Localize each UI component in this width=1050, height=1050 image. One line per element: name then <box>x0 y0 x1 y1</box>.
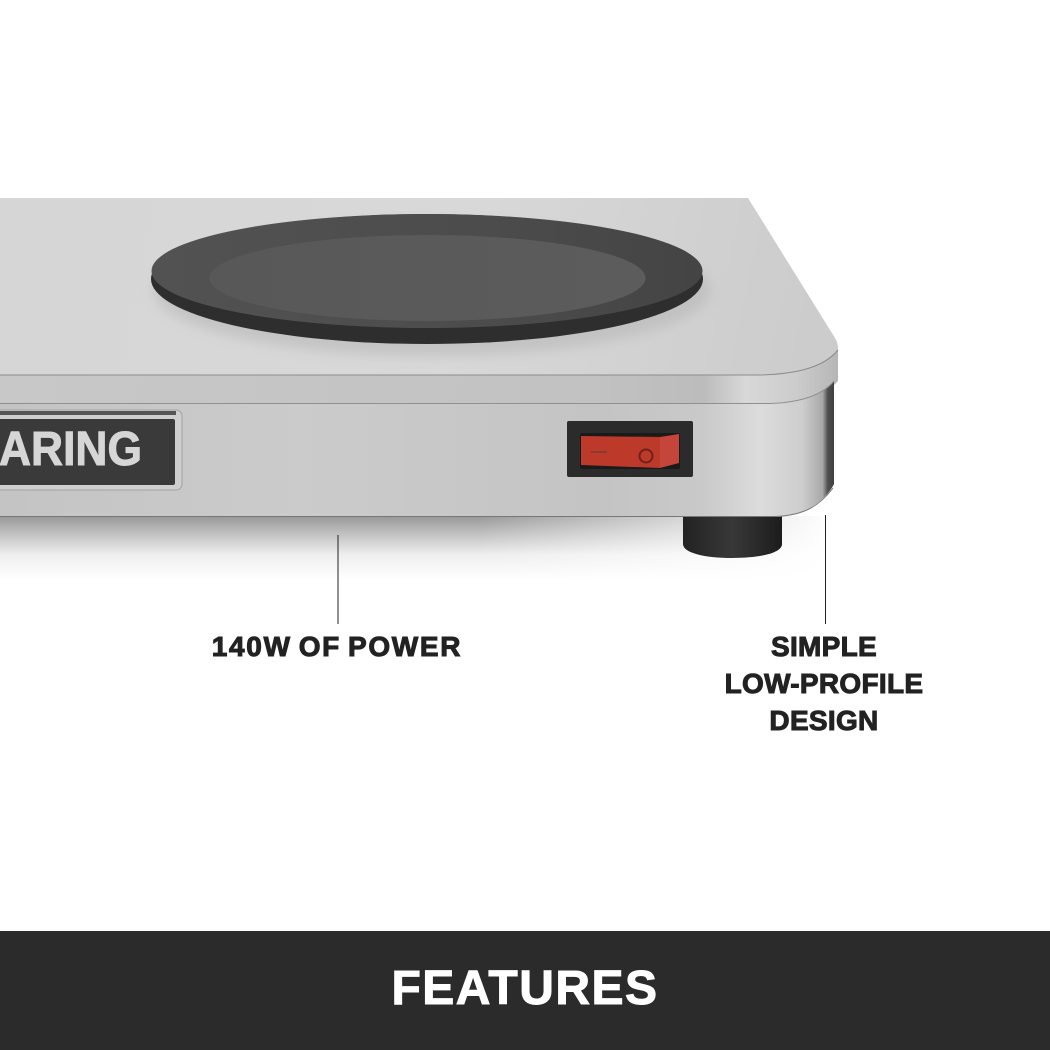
badge: WARING <box>0 410 182 490</box>
foot <box>683 512 782 558</box>
footer title: FEATURES <box>391 962 659 1015</box>
product illustration: warmer <box>0 198 838 624</box>
label: simple low-profile design: DESIGN <box>769 705 879 736</box>
footer band <box>0 931 1050 1050</box>
label: 140W of power: 140W OF POWER <box>212 631 462 662</box>
floor shadow <box>0 516 830 580</box>
label: simple low-profile design: SIMPLE <box>771 631 877 662</box>
leader line: power <box>338 535 339 624</box>
power switch <box>567 421 693 477</box>
label: simple low-profile design: LOW-PROFILE <box>725 668 923 699</box>
front body <box>0 381 834 517</box>
leader line: design <box>825 515 826 624</box>
black heating plate <box>151 214 703 344</box>
plate soft shadow <box>154 224 710 356</box>
front rim <box>0 350 838 404</box>
badge: WARING: ARING <box>0 423 142 476</box>
label: simple low-profile design <box>725 631 923 736</box>
top plate <box>0 198 838 375</box>
